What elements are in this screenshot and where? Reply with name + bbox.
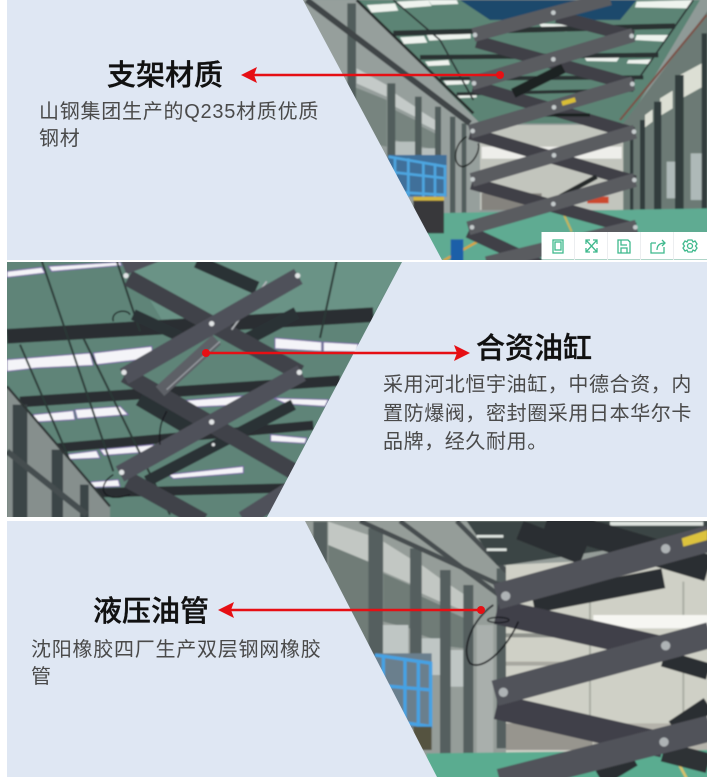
photo: scissor lift in factory hall — [293, 0, 714, 265]
text: cylinder description: 品牌，经久耐用。 — [383, 430, 548, 453]
toolbar — [542, 232, 707, 260]
text: frame material description: 山钢集团生产的Q235材质优质 — [39, 100, 319, 123]
text: hose description: 管 — [31, 665, 52, 688]
photo: close-up of hose and scissor arms — [293, 515, 713, 777]
heading: 支架材质: 支架材质 — [107, 59, 223, 92]
icon: share — [651, 240, 665, 253]
photo: scissor arms against the roof — [0, 253, 413, 521]
arrow: points to hose fitting — [218, 602, 485, 618]
text background: diagonal blue panel — [267, 262, 707, 517]
icon: settings — [683, 240, 697, 252]
heading: 合资油缸: 合资油缸 — [476, 332, 592, 365]
text: frame material description: 钢材 — [39, 127, 80, 150]
icon: fullscreen — [586, 240, 597, 252]
panel: hydraulic hose — [7, 515, 713, 777]
text background: diagonal blue panel — [7, 521, 437, 777]
text background: diagonal blue panel — [7, 0, 442, 260]
icon: tablet — [553, 240, 563, 253]
icon: save — [618, 240, 630, 253]
panel: frame material — [7, 0, 714, 265]
text: cylinder description: 采用河北恒宇油缸，中德合资，内 — [383, 373, 692, 396]
text: cylinder description: 置防爆阀，密封圈采用日本华尔卡 — [383, 402, 692, 425]
text: hose description: 沈阳橡胶四厂生产双层钢网橡胶 — [31, 638, 322, 661]
arrow: points to frame arm — [241, 67, 504, 83]
heading: 液压油管: 液压油管 — [93, 595, 209, 628]
arrow: points to cylinder — [202, 345, 470, 361]
panel: joint-venture cylinder — [0, 253, 707, 521]
